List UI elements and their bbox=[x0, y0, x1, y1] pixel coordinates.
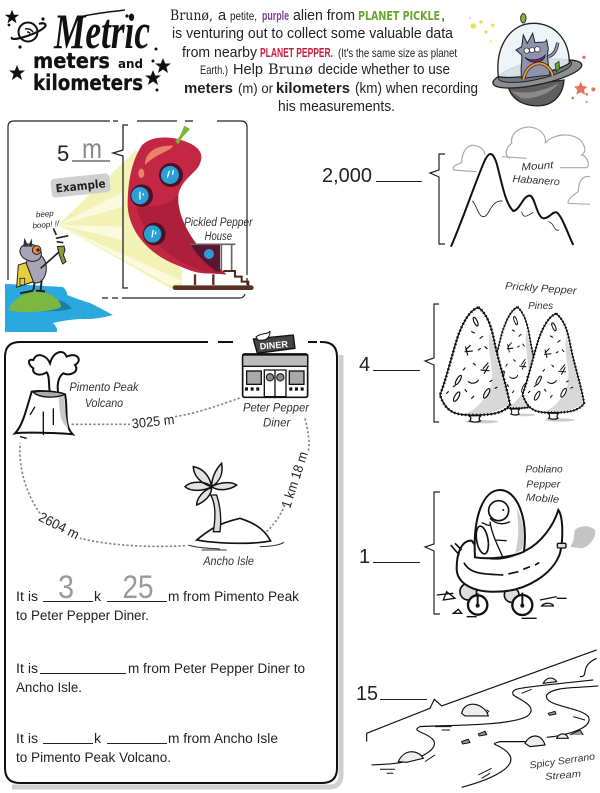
question 3: k bbox=[94, 731, 102, 747]
clouds bbox=[453, 127, 590, 204]
pines caption: Prickly Pepper bbox=[505, 281, 578, 297]
captions: Pimento Peak bbox=[69, 381, 140, 394]
ripples bbox=[380, 689, 585, 778]
caption: Pickled Pepper bbox=[184, 215, 253, 229]
distance labels: 1 km 18 m bbox=[279, 450, 311, 510]
antenna bbox=[521, 13, 526, 23]
icon: alien in flying saucer bbox=[469, 13, 595, 106]
rocks bbox=[398, 678, 568, 762]
captions: Diner bbox=[263, 417, 291, 430]
question 2 bbox=[16, 661, 305, 696]
stars coral bbox=[571, 56, 595, 103]
subtitle: meters and kilometers: kilometers bbox=[33, 71, 143, 95]
question 3: It is bbox=[16, 731, 38, 747]
caption: beep bbox=[36, 209, 55, 219]
caption: Spicy Serrano bbox=[529, 751, 596, 772]
bracket bbox=[425, 304, 439, 422]
item: Poblano Pepper Mobile bbox=[359, 465, 595, 618]
hull bbox=[508, 80, 564, 106]
question 1: It is bbox=[16, 589, 38, 605]
panel: distances bbox=[5, 331, 341, 787]
intro text: PLANET PEPPER. bbox=[260, 45, 333, 60]
subtitle: meters and kilometers: and bbox=[118, 57, 143, 71]
question 3 bbox=[16, 731, 278, 766]
answer 5 m: m bbox=[82, 133, 102, 164]
title word: Metric: Metric bbox=[53, 3, 150, 59]
title swash bbox=[80, 10, 125, 17]
caption: Mount bbox=[521, 160, 555, 173]
captions: Ancho Isle bbox=[202, 555, 254, 568]
legs bbox=[20, 280, 45, 293]
pines caption: Pines bbox=[528, 301, 553, 312]
answer 5 m: 5 bbox=[57, 141, 69, 166]
distance labels bbox=[36, 412, 311, 542]
intro text: is venturing out to collect some valuable data bbox=[172, 26, 454, 42]
intro text: Earth.) bbox=[200, 63, 228, 77]
question 2: Ancho Isle. bbox=[16, 680, 82, 696]
label 1: 1 bbox=[359, 546, 370, 568]
subtitle: meters and kilometers: meters bbox=[33, 49, 110, 73]
panel: example bbox=[5, 121, 254, 332]
panel border bbox=[5, 342, 337, 783]
intro text: Help bbox=[233, 62, 263, 78]
diner: DINER bbox=[259, 339, 289, 352]
filled answers: 3 bbox=[58, 569, 74, 605]
car body bbox=[457, 510, 562, 592]
distance labels: 2604 m bbox=[36, 509, 82, 542]
icon: ringed planet bbox=[12, 22, 46, 42]
question 3: to Pimento Peak Volcano. bbox=[16, 750, 171, 766]
caption: Poblano bbox=[525, 465, 563, 476]
intro text: purple bbox=[262, 8, 289, 23]
flashlight bbox=[41, 252, 59, 268]
bracket bbox=[425, 492, 440, 614]
dome bbox=[498, 23, 569, 77]
island bbox=[40, 300, 72, 312]
question 1 bbox=[16, 569, 300, 624]
bracket bbox=[430, 154, 445, 244]
bracket line bbox=[367, 650, 597, 742]
bracket bbox=[113, 125, 128, 288]
mountain bbox=[451, 154, 573, 247]
intro text: from nearby bbox=[182, 45, 258, 61]
beam stripes bbox=[58, 192, 183, 285]
ground bbox=[437, 592, 567, 618]
question 3: m from Ancho Isle bbox=[168, 731, 278, 747]
answer 5 m bbox=[57, 133, 110, 166]
intro text: , bbox=[441, 8, 445, 24]
dotted route: diner to isle bbox=[267, 418, 309, 532]
intro text: kilometers bbox=[276, 81, 350, 97]
snow lines bbox=[472, 201, 559, 230]
windows bbox=[130, 163, 183, 245]
question 2: m from Peter Pepper Diner to bbox=[128, 661, 305, 677]
label 4: 4 bbox=[359, 354, 370, 376]
palm island bbox=[185, 463, 284, 550]
intro text: petite, bbox=[230, 9, 257, 23]
label 2,000 bbox=[322, 165, 422, 187]
driver bbox=[489, 501, 509, 521]
pepper body bbox=[128, 137, 227, 274]
alien with flashlight: boop! !/ bbox=[32, 219, 60, 230]
pepper house bbox=[58, 126, 254, 290]
item: Prickly Pepper Pines bbox=[359, 281, 584, 423]
item: Poblano Pepper Mobile: Mobile bbox=[525, 493, 560, 506]
item: Mount Habanero bbox=[322, 127, 590, 247]
stars yellow bbox=[469, 17, 495, 42]
pine trees bbox=[440, 307, 584, 423]
subtitle: meters and kilometers bbox=[33, 49, 143, 95]
captions bbox=[69, 381, 310, 568]
intro text: a bbox=[218, 8, 227, 24]
porch bbox=[191, 245, 220, 272]
pines caption bbox=[505, 281, 578, 312]
volcano bbox=[15, 352, 79, 438]
rear wheels bbox=[460, 583, 477, 600]
pepper house: House bbox=[205, 229, 232, 243]
captions: Volcano bbox=[85, 397, 124, 410]
filled answers bbox=[58, 569, 154, 605]
question 1: m from Pimento Peak bbox=[168, 589, 300, 605]
exhaust cloud bbox=[570, 526, 595, 548]
backpack bbox=[17, 263, 33, 287]
intro text bbox=[170, 8, 478, 115]
item: Poblano Pepper Mobile: Pepper bbox=[526, 479, 561, 490]
intro text: Brunø bbox=[268, 62, 313, 78]
item: Spicy Serrano Stream: Stream bbox=[545, 769, 582, 783]
distance labels: 3025 m bbox=[131, 412, 175, 431]
intro text: his measurements. bbox=[278, 99, 395, 115]
rim bbox=[491, 54, 584, 94]
item: Spicy Serrano Stream bbox=[356, 650, 598, 787]
intro text: meters bbox=[184, 81, 233, 97]
panel border bbox=[8, 121, 247, 298]
intro text: decide whether to use bbox=[318, 62, 450, 78]
intro text: (It's the same size as planet bbox=[338, 46, 458, 60]
captions: Peter Pepper bbox=[243, 402, 310, 415]
bird on sign bbox=[256, 331, 270, 340]
water bbox=[5, 284, 113, 332]
alien body bbox=[26, 254, 46, 283]
dome bbox=[475, 490, 525, 558]
steering wheel bbox=[523, 63, 553, 80]
label 4 bbox=[359, 354, 420, 376]
label 1 bbox=[359, 546, 420, 568]
car details bbox=[451, 543, 539, 575]
cockpit bbox=[497, 54, 573, 87]
question 1: k bbox=[94, 589, 102, 605]
alien bbox=[516, 33, 550, 78]
question 1: to Peter Pepper Diner. bbox=[16, 608, 149, 624]
alien with flashlight bbox=[8, 209, 72, 312]
label 15 bbox=[356, 683, 427, 705]
panel shadow bbox=[12, 355, 341, 787]
item: Mount Habanero: Habanero bbox=[512, 174, 560, 188]
light beams bbox=[58, 150, 182, 288]
diner bbox=[243, 335, 308, 397]
base and stairs bbox=[195, 274, 213, 285]
dotted route: isle to volcano bbox=[20, 443, 185, 546]
intro text: Brunø, bbox=[170, 8, 213, 24]
title bbox=[5, 3, 171, 95]
intro text: (m) or bbox=[238, 81, 273, 96]
intro text: PLANET PICKLE bbox=[358, 9, 440, 23]
intro text: (km) when recording bbox=[355, 81, 478, 97]
label 15: 15 bbox=[356, 683, 378, 705]
icon: title stars bbox=[5, 10, 171, 91]
filled answers: 25 bbox=[122, 569, 154, 605]
dotted route: volcano to diner bbox=[72, 398, 241, 424]
example badge: Example bbox=[55, 176, 106, 196]
question 2: It is bbox=[16, 661, 38, 677]
label 2,000: 2,000 bbox=[322, 165, 372, 187]
front wheels bbox=[468, 595, 487, 615]
intro text: alien from bbox=[293, 8, 355, 24]
stream banks bbox=[372, 658, 598, 787]
